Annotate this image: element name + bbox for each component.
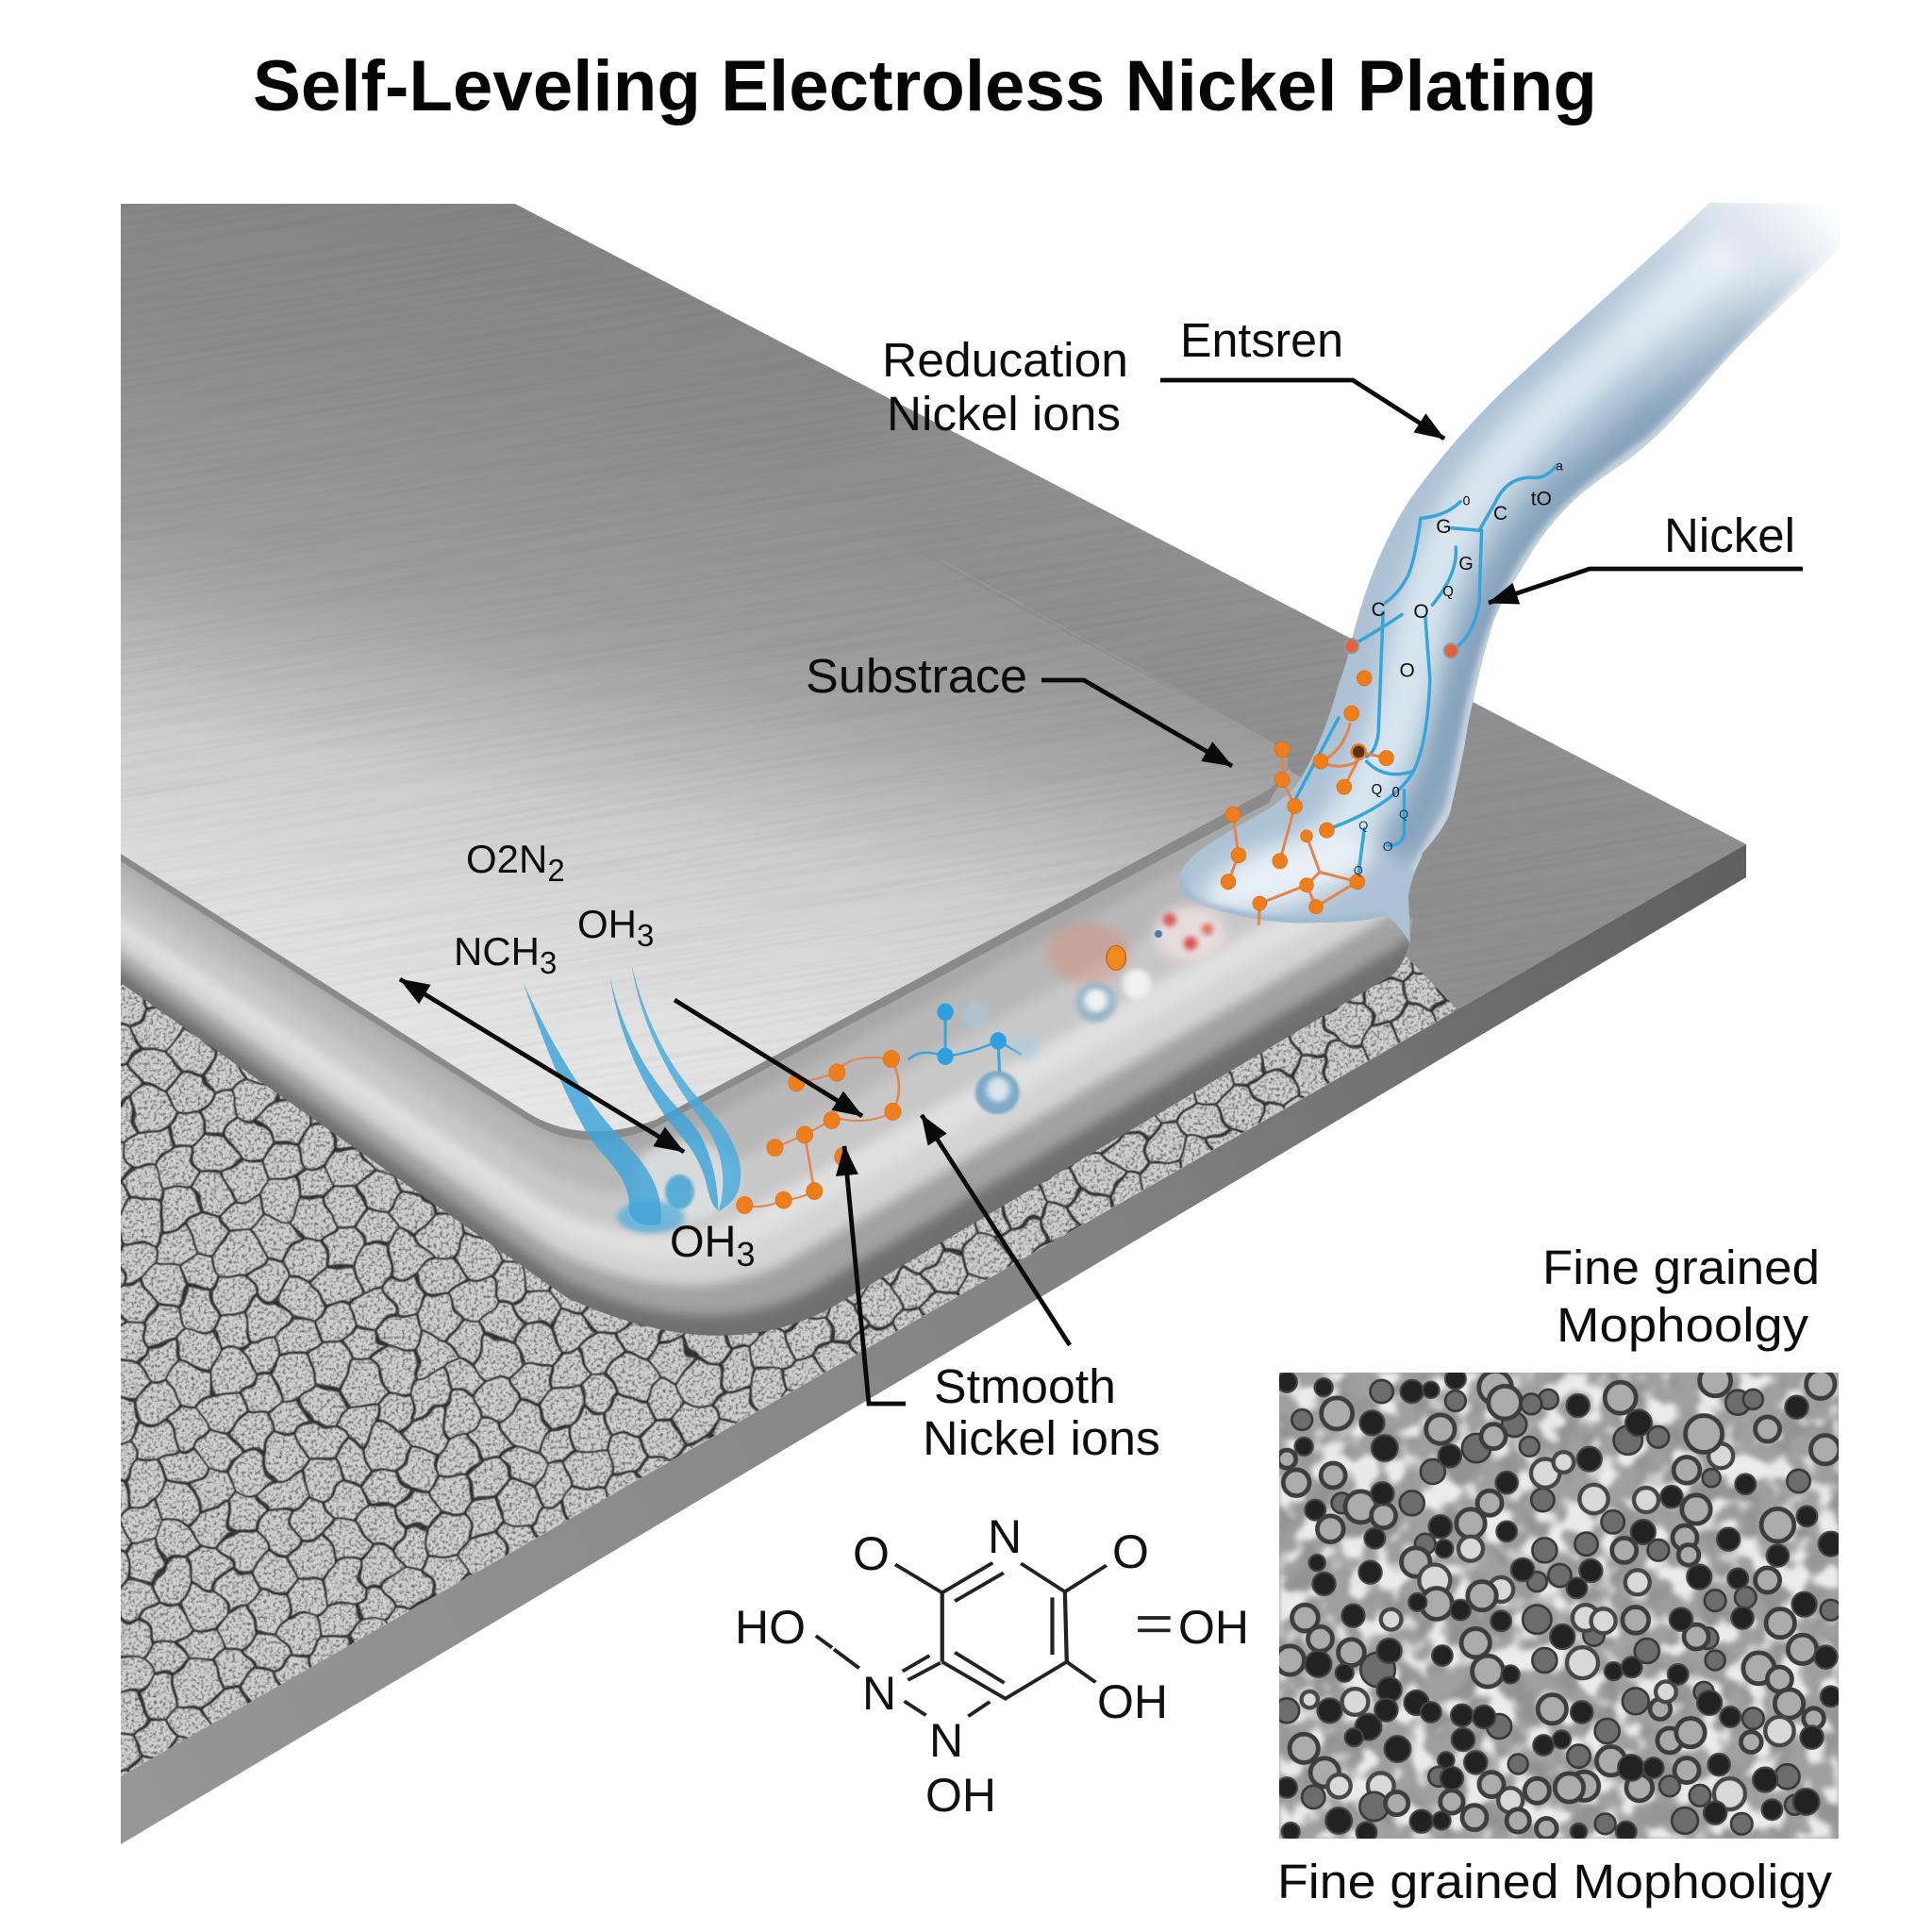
label: Fine grained Mophoolgy: Mophoolgy — [1557, 1298, 1809, 1352]
chemical structure diagram: N — [988, 1510, 1022, 1563]
chemical structure diagram — [735, 1510, 1249, 1822]
arrow: smooth to layer — [922, 1115, 1070, 1345]
label: Reducation Nickel ions: Nickel ions — [887, 387, 1121, 441]
arrow: reduction to chain — [675, 1000, 862, 1116]
label: OH3 upper: OH — [577, 902, 637, 946]
molecular network inside stream: O — [1413, 601, 1429, 623]
molecular network inside stream: O — [1400, 659, 1415, 681]
molecular network inside stream: a — [1556, 458, 1563, 474]
label: OH3 lower: 3 — [736, 1235, 756, 1274]
molecular network inside stream: Q — [1358, 818, 1368, 833]
label: Stmooth Nickel ions — [923, 1359, 1160, 1465]
chemical structure diagram: OH — [925, 1769, 996, 1822]
label: Fine grained Mophoolgy: Fine grained — [1542, 1241, 1820, 1294]
label: NCH3: NCH — [454, 929, 540, 974]
nickel solution stream — [1179, 203, 1840, 943]
molecular network inside stream: 0 — [1463, 493, 1471, 508]
molecular network inside stream: Q — [1442, 584, 1454, 600]
micrograph panel: fine grained morphology — [1274, 1365, 1843, 1842]
chemical structure diagram: O — [853, 1527, 890, 1580]
chemical structure diagram: OH — [1097, 1675, 1168, 1728]
substrate side face — [121, 844, 1746, 1844]
molecular network inside stream: C — [1493, 503, 1507, 525]
molecular network inside stream: Q — [1399, 807, 1408, 821]
arrow: double headed — [400, 979, 684, 1152]
blurred nickel particles near stream — [1155, 906, 1226, 962]
chemical structure diagram: OH — [1178, 1601, 1249, 1654]
label: Reducation Nickel ions: Reducation — [882, 333, 1128, 387]
cracked rough surface texture — [121, 956, 1457, 1776]
molecular network inside stream: tO — [1531, 488, 1552, 510]
leveled nickel layer — [121, 770, 1412, 1336]
label: Fine grained Mophoolgy — [1542, 1241, 1820, 1352]
molecular network inside stream: Q — [1372, 782, 1383, 798]
label: OH3 upper: 3 — [637, 918, 654, 953]
arrow: smooth to nickel ion — [844, 1146, 906, 1404]
chemical structure diagram: N — [862, 1667, 896, 1720]
chemical structure diagram: O — [1112, 1525, 1149, 1578]
molecular network inside stream: Q — [1354, 863, 1363, 877]
molecular network inside stream — [1221, 458, 1563, 925]
label: Reducation Nickel ions — [882, 333, 1128, 441]
arrow: Substrace — [1041, 680, 1232, 766]
label: O2N2: O2N — [466, 837, 547, 881]
label: Substrace: Substrace — [806, 649, 1027, 703]
chemical structure diagram: HO — [735, 1601, 806, 1654]
chemical structure diagram: N — [929, 1714, 963, 1767]
label: O2N2: 2 — [547, 853, 565, 888]
molecular network inside stream: G — [1458, 554, 1474, 575]
substrate plate base — [121, 204, 1746, 1776]
arrow: Entsren — [1160, 380, 1444, 439]
label: Entsren: Entsren — [1180, 313, 1343, 367]
molecular network inside stream: O — [1383, 839, 1392, 854]
label: Nickel: Nickel — [1664, 508, 1795, 562]
caption: Fine grained Mophooligy: Fine grained Mophooligy — [1277, 1855, 1833, 1908]
molecular network inside stream: 0 — [1392, 785, 1400, 801]
arrow: Nickel — [1489, 569, 1803, 603]
title: Self-Leveling Electroless Nickel Plating — [253, 46, 1597, 126]
label: Stmooth Nickel ions: Stmooth — [934, 1359, 1116, 1413]
molecular network inside stream: C — [1372, 599, 1386, 621]
smooth top plate — [121, 561, 1289, 1140]
molecular network inside stream: G — [1436, 516, 1452, 538]
label: Stmooth Nickel ions: Nickel ions — [923, 1411, 1160, 1465]
reaction products near corner — [524, 923, 1151, 1233]
label: OH3 lower: OH — [670, 1216, 736, 1266]
label: NCH3: 3 — [540, 945, 557, 980]
